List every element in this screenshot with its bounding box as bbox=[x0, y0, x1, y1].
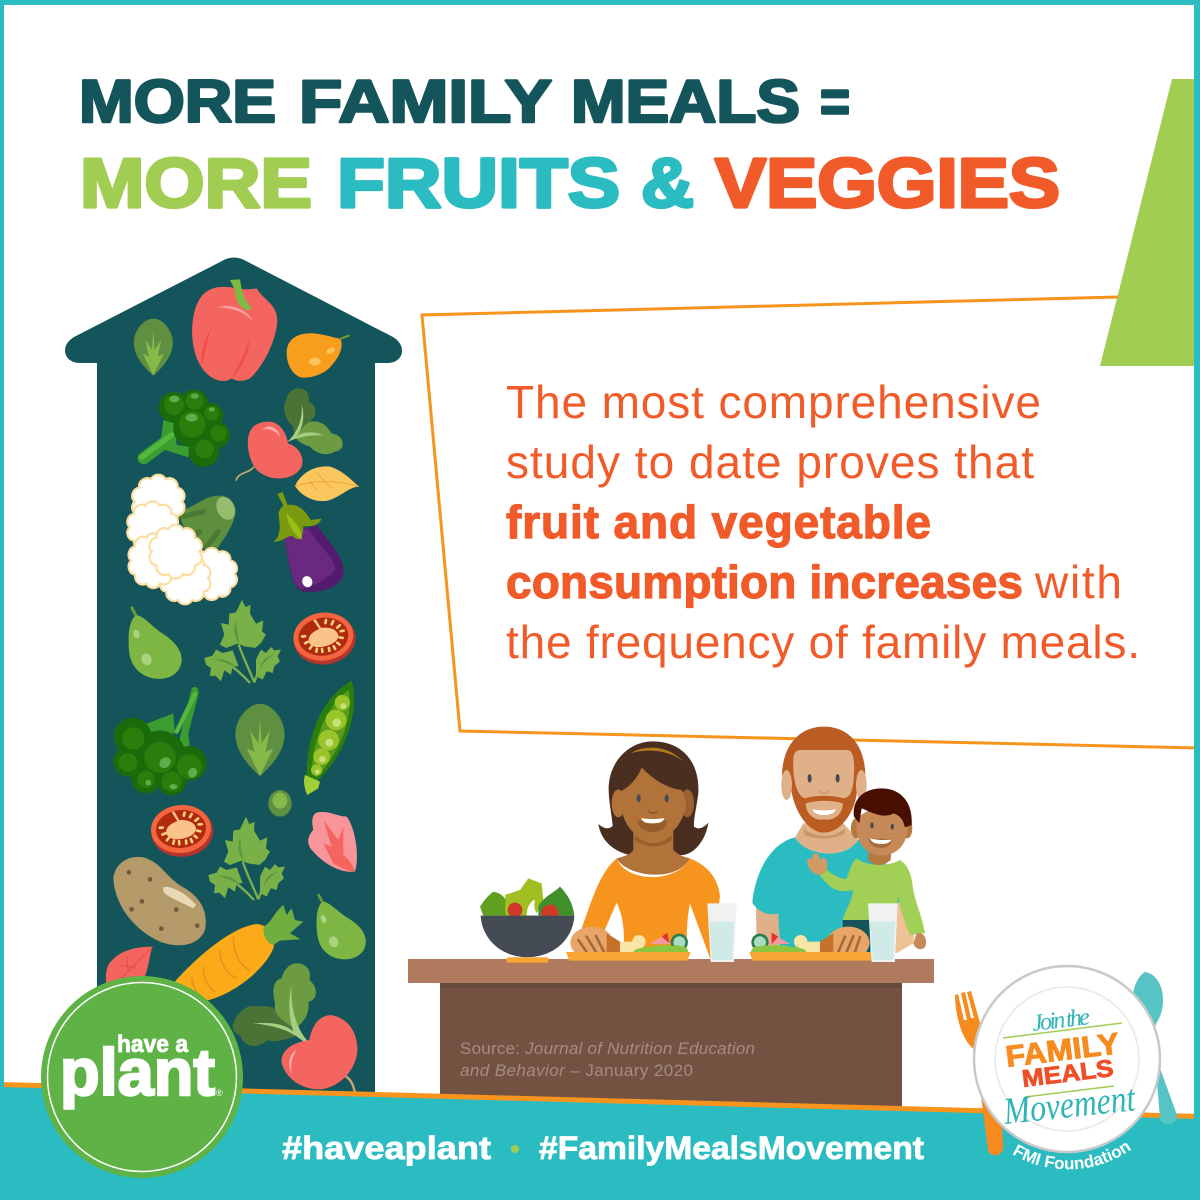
right glass bbox=[868, 903, 898, 962]
icon: single pea bbox=[268, 790, 292, 817]
child neck bbox=[868, 848, 892, 865]
join the family meals movement plate: Join the bbox=[1031, 1004, 1092, 1037]
callout text: the frequency of family meals. bbox=[506, 616, 1140, 668]
table top bbox=[408, 959, 934, 983]
child green shirt bbox=[820, 858, 925, 935]
title line 1: = bbox=[820, 68, 850, 135]
woman hair bbox=[598, 741, 708, 855]
join the family meals movement plate: Movement bbox=[1001, 1077, 1138, 1133]
man face bbox=[793, 750, 854, 798]
woman ears bbox=[612, 789, 625, 817]
icon: eggplant bbox=[273, 492, 344, 592]
callout text bbox=[506, 376, 1140, 668]
icon: broccoli bbox=[138, 390, 230, 467]
child bbox=[807, 788, 926, 953]
hashtags: #FamilyMealsMovement bbox=[539, 1130, 924, 1166]
source note bbox=[460, 1039, 755, 1080]
hashtag separator dot bbox=[511, 1145, 519, 1153]
man neck bbox=[795, 823, 858, 853]
hashtags bbox=[282, 1130, 924, 1166]
right tray bbox=[749, 952, 874, 961]
icon: cilantro sprig bbox=[208, 817, 285, 900]
fork icon bbox=[955, 991, 1003, 1155]
title line 1 bbox=[79, 68, 850, 135]
food on left tray bbox=[620, 933, 688, 952]
FMI Foundation curved label bbox=[1012, 1143, 1131, 1170]
title line 2: VEGGIES bbox=[715, 144, 1060, 222]
child head bbox=[851, 818, 861, 838]
icon: red bell pepper bbox=[192, 279, 277, 381]
join the family meals movement plate: FAMILY bbox=[1004, 1027, 1121, 1074]
icon: tomato slice bbox=[290, 608, 359, 669]
food on right tray bbox=[751, 933, 820, 952]
title line 2 bbox=[80, 144, 1060, 222]
callout text: consumption increases bbox=[506, 556, 1023, 608]
source note: and Behavior – January 2020 bbox=[460, 1061, 693, 1080]
icon: radish with leaves bbox=[236, 388, 343, 481]
icon: pink leaf bbox=[308, 812, 357, 872]
have a plant logo bbox=[41, 976, 243, 1178]
icon: carrot bbox=[160, 905, 303, 1020]
title line 1: MORE bbox=[79, 68, 276, 135]
salad bowl bbox=[480, 878, 574, 963]
woman bbox=[570, 741, 720, 960]
source note: Source: Journal of Nutrition Education bbox=[460, 1039, 755, 1058]
man hair and beard bbox=[782, 727, 865, 833]
join the family meals movement plate bbox=[974, 966, 1160, 1152]
child hand bbox=[913, 933, 926, 949]
family at the table bbox=[480, 727, 926, 963]
icon: red leaf bbox=[106, 947, 153, 997]
woman neck and chest bbox=[617, 830, 690, 875]
hashtags: #haveaplant bbox=[282, 1130, 491, 1166]
callout text: fruit and vegetable bbox=[506, 496, 931, 548]
left glass bbox=[707, 903, 737, 962]
man bbox=[752, 727, 915, 953]
icon: cauliflower bbox=[127, 475, 239, 604]
drumstick on left tray bbox=[570, 927, 620, 959]
vegetables lower group bbox=[106, 681, 366, 1093]
table base bbox=[440, 983, 902, 1113]
icon: potato bbox=[113, 857, 206, 945]
title line 2: MORE bbox=[80, 144, 312, 222]
have a plant logo: ® bbox=[216, 1088, 223, 1098]
icon: broccoli bbox=[113, 687, 207, 795]
title line 2: FRUITS bbox=[337, 144, 620, 222]
up arrow panel bbox=[65, 258, 402, 1100]
woman orange shirt bbox=[582, 858, 720, 960]
have a plant logo: plant bbox=[60, 1035, 215, 1109]
man ears bbox=[781, 770, 792, 800]
drumstick on right tray bbox=[820, 927, 870, 959]
green accent shape bbox=[1100, 79, 1200, 366]
callout text: study to date proves that bbox=[506, 436, 1034, 488]
icon: tomato slice bbox=[149, 802, 215, 859]
icon: radish with leaves bbox=[233, 963, 357, 1093]
icon: yellow leaf bbox=[295, 466, 359, 501]
title line 1: MEALS bbox=[571, 68, 800, 135]
woman face bbox=[621, 767, 686, 840]
icon: pea pod bbox=[304, 681, 354, 795]
vegetables upper group bbox=[127, 279, 359, 680]
title line 2: & bbox=[641, 144, 694, 222]
icon: orange pear bbox=[287, 333, 349, 378]
icon: green pear bbox=[127, 607, 183, 680]
callout text: with bbox=[1034, 556, 1122, 608]
child smile bbox=[869, 839, 893, 848]
join the family meals movement plate: MEALS bbox=[1020, 1055, 1115, 1093]
callout box outline bbox=[422, 297, 1200, 748]
left tray bbox=[566, 952, 691, 961]
icon: spinach leaf bbox=[134, 319, 173, 376]
man arms bbox=[756, 907, 780, 953]
child shorts bbox=[843, 917, 870, 953]
icon: spinach leaf bbox=[235, 704, 285, 776]
child hair bbox=[854, 788, 912, 827]
title line 1: FAMILY bbox=[299, 68, 552, 135]
spoon icon bbox=[1132, 972, 1177, 1124]
man teal shirt bbox=[752, 837, 900, 953]
icon: cilantro sprig bbox=[204, 600, 281, 683]
callout text: The most comprehensive bbox=[506, 376, 1041, 428]
icon: green pear bbox=[317, 894, 366, 959]
title bbox=[79, 68, 1060, 222]
FMI Foundation curved label: FMI Foundation bbox=[1012, 1143, 1131, 1170]
bottom band bbox=[0, 1082, 1200, 1200]
have a plant logo: have a bbox=[117, 1031, 189, 1058]
